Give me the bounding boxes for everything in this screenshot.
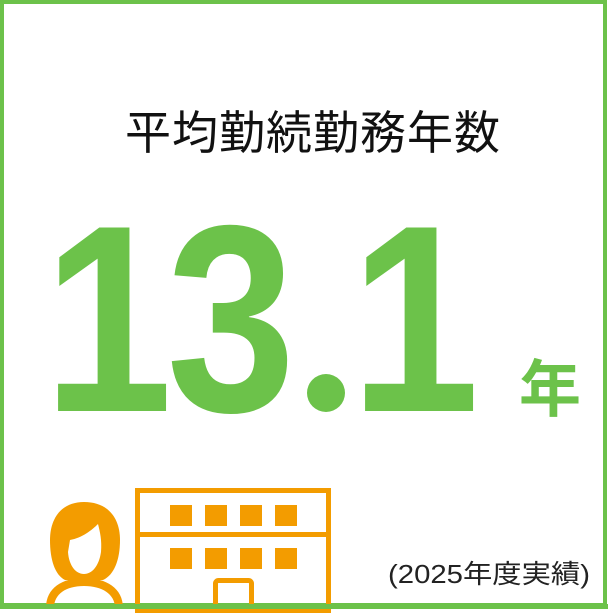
icon: building bbox=[137, 490, 329, 610]
big number: . bbox=[294, 170, 358, 468]
note: (2025年度実績) bbox=[388, 559, 590, 589]
big number bbox=[43, 170, 480, 468]
bottom border bbox=[0, 604, 608, 609]
big number: 1 bbox=[350, 170, 480, 468]
icon: person bbox=[46, 502, 123, 608]
big number: 3 bbox=[166, 170, 296, 468]
unit: 年 bbox=[519, 356, 581, 425]
title: 平均勤続勤務年数 bbox=[125, 107, 501, 159]
decimal dot bbox=[307, 374, 345, 412]
big number: 1 bbox=[43, 170, 173, 468]
